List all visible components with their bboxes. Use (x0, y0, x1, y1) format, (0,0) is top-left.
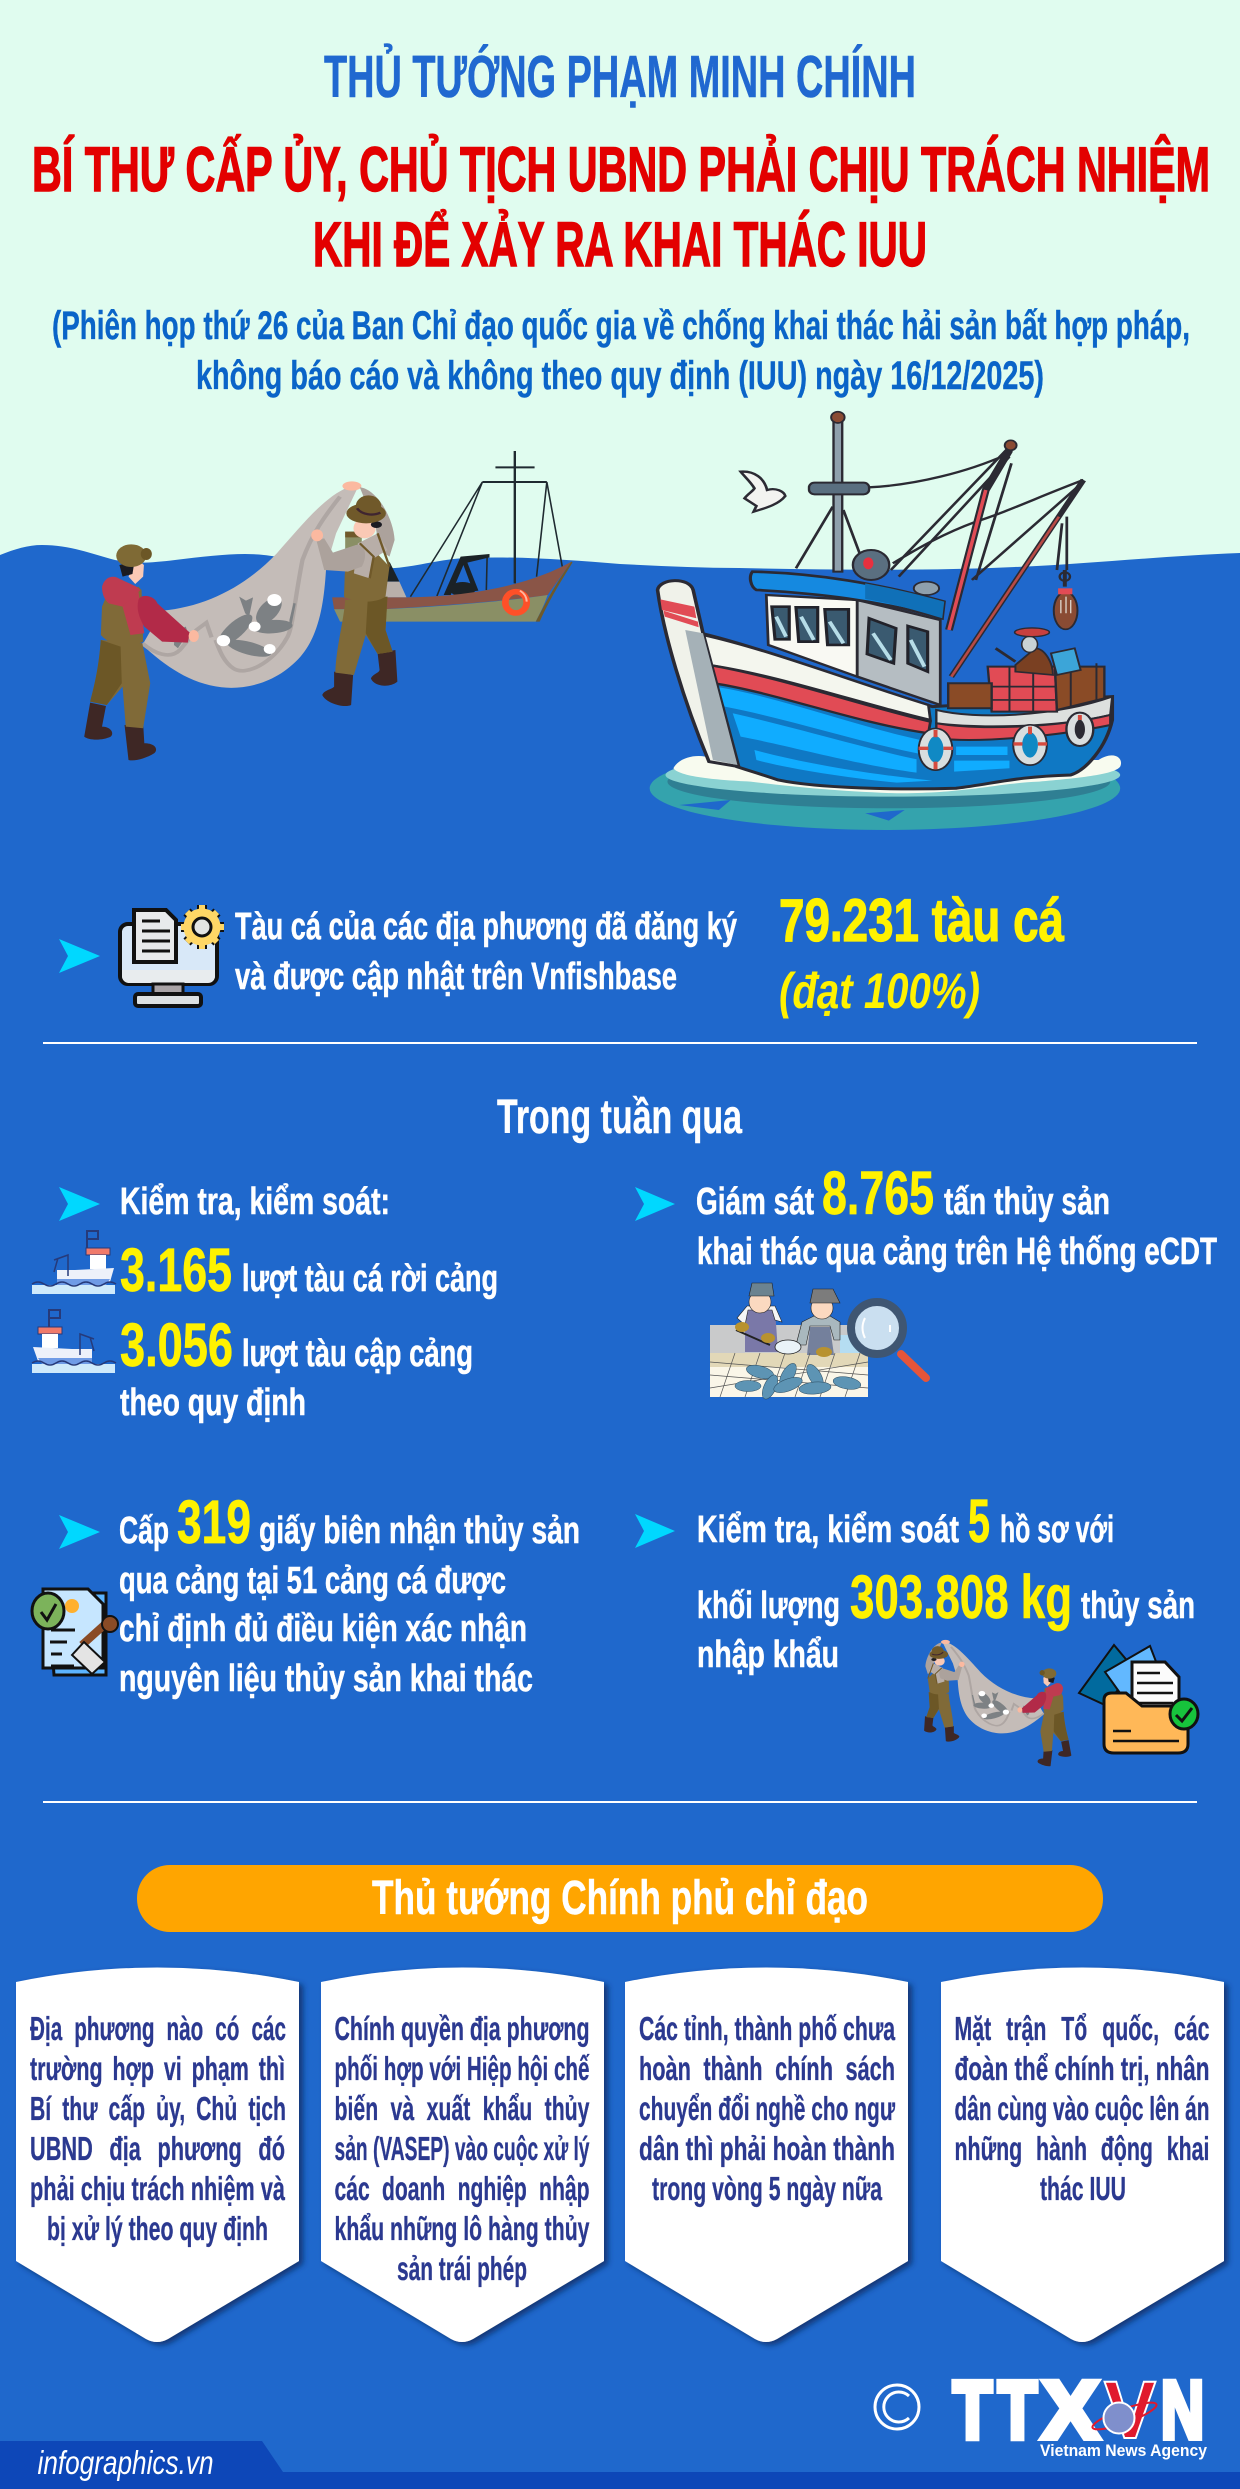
figure: 79.231 vessels: 79.231 tàu cá (779, 887, 1064, 954)
icon: folder with check mark (1079, 1645, 1198, 1753)
card 1: local accountability: Địa phương nào có các (30, 2010, 286, 2047)
arrow bullet (59, 1515, 100, 1549)
card 3: career change policy: trong vòng 5 ngày nữa (652, 2170, 882, 2207)
logo: TTXVN Vietnam News Agency: T (998, 2365, 1037, 2456)
card 2: VASEP cooperation: biến và xuất khẩu thủy (334, 2090, 590, 2127)
hull (701, 633, 1112, 789)
header titles (32, 43, 1210, 398)
heading line 2: KHI ĐỂ XẢY RA KHAI THÁC IUU (313, 209, 927, 280)
life rings (919, 715, 1089, 769)
background: blue sea with wavy top (0, 545, 1240, 2489)
arrow bullet (635, 1187, 675, 1221)
arrow bullet (635, 1514, 675, 1548)
card 2: VASEP cooperation (321, 1968, 604, 2342)
card 3: career change policy: chuyển đổi nghề cho ngư (639, 2090, 895, 2127)
banner: prime minister directs (137, 1865, 1103, 1932)
icon: stamped document (32, 1589, 118, 1675)
card 3: career change policy: dân thì phải hoàn thành (639, 2130, 895, 2167)
text: dossiers: hồ sơ với (1000, 1509, 1114, 1551)
footer: copyright symbol (875, 2385, 919, 2429)
text: vessels arriving: lượt tàu cập cảng (242, 1333, 473, 1375)
text: registered vessels: Tàu cá của các địa phương đã đăng ký (235, 906, 737, 948)
stern post (658, 581, 739, 767)
icon: magnifying glass (851, 1302, 926, 1378)
icon: ship arriving (32, 1309, 116, 1373)
card 2: VASEP cooperation: Chính quyền địa phương (334, 2010, 590, 2047)
arrow bullet (59, 939, 100, 973)
logo: TTXVN Vietnam News Agency: V (1104, 2365, 1156, 2456)
figure: 5: 5 (968, 1487, 990, 1555)
card 2: VASEP cooperation: các doanh nghiệp nhập (334, 2170, 590, 2207)
banner: prime minister directs: Thủ tướng Chính phủ chỉ đạo (372, 1872, 868, 1925)
card 4: fatherland front: thác IUU (1040, 2170, 1126, 2207)
block: inspections at port: theo quy định (120, 1382, 306, 1424)
fish catch (174, 594, 295, 660)
icon: ship leaving (32, 1230, 116, 1294)
net (142, 487, 358, 688)
cabin (750, 572, 944, 705)
illustration: small fishing boat (332, 451, 573, 622)
block: receipts issued: qua cảng tại 51 cảng cá được (119, 1560, 506, 1602)
figure: reached 100 percent: (đạt 100%) (779, 963, 980, 1019)
section: registered vessels (59, 887, 1064, 1019)
block: inspections at port (32, 1181, 498, 1424)
text: inspect: Kiểm tra, kiểm soát (697, 1509, 959, 1551)
card 3: career change policy: Các tỉnh, thành phố chưa (639, 2010, 895, 2047)
logo: TTXVN Vietnam News Agency (953, 2365, 1207, 2460)
water and foam under the boat (650, 747, 1121, 830)
block: monitoring eCDT (635, 1159, 1217, 1401)
text: vessels leaving port: lượt tàu cá rời cảng (242, 1258, 498, 1300)
illustration: large blue fishing boat with seagull (650, 412, 1121, 830)
card 3: career change policy (625, 1968, 908, 2342)
card 1: local accountability: Bí thư cấp ủy, Chủ tịch (30, 2090, 286, 2127)
block: receipts issued: nguyên liệu thủy sản khai thác (119, 1658, 533, 1700)
card 1: local accountability: trường hợp vi phạm thì (30, 2050, 285, 2087)
heading: last week: Trong tuần qua (497, 1091, 742, 1144)
footer bar (0, 2441, 1240, 2489)
block: receipts issued (32, 1488, 580, 1700)
section: registered vessels: và được cập nhật trên Vnfishbase (235, 956, 677, 998)
card 4: fatherland front (941, 1968, 1224, 2342)
figure: 3.165: 3.165 (120, 1236, 232, 1304)
card 1: local accountability: phải chịu trách nhiệm và (30, 2170, 285, 2207)
text: receipts: giấy biên nhận thủy sản (259, 1510, 580, 1552)
left fisherman in red shirt (84, 544, 199, 760)
figure: 303.808 kg: 303.808 kg (850, 1563, 1072, 1631)
text: issue: Cấp (119, 1510, 169, 1552)
illustration: workers sorting fish (710, 1283, 868, 1401)
logo: TTXVN Vietnam News Agency: X (1042, 2365, 1099, 2456)
footer: website: infographics.vn (38, 2444, 214, 2481)
text: tonnes: tấn thủy sản (944, 1181, 1110, 1223)
figure: 319: 319 (177, 1488, 251, 1556)
logo: TTXVN Vietnam News Agency: T (953, 2365, 992, 2456)
logo: TTXVN Vietnam News Agency: Vietnam News Agency (1040, 2441, 1207, 2460)
title: prime minister: THỦ TƯỚNG PHẠM MINH CHÍNH (324, 43, 916, 110)
logo: TTXVN Vietnam News Agency: N (1161, 2365, 1204, 2456)
right fisherman in hat (311, 481, 397, 706)
card 3: career change policy: hoàn thành chính sách (639, 2050, 895, 2087)
text: seafood imports: thủy sản (1081, 1585, 1195, 1627)
block: import dossiers: nhập khẩu (697, 1634, 839, 1676)
seagull (741, 472, 785, 512)
text: inspection label: Kiểm tra, kiểm soát: (120, 1181, 390, 1223)
card 1: local accountability: UBND địa phương đó (30, 2130, 285, 2167)
card 1: local accountability (16, 1968, 299, 2342)
block: import dossiers (635, 1487, 1198, 1766)
icon: computer with document and gear (120, 905, 224, 1006)
figure: 3.056: 3.056 (120, 1311, 233, 1379)
arrow bullet (59, 1187, 100, 1221)
block: import dossiers: khối lượng (697, 1585, 840, 1627)
card 2: VASEP cooperation: sản trái phép (397, 2250, 527, 2287)
fisherman and crates on the stern (948, 628, 1104, 712)
hanging weight (1054, 570, 1077, 629)
card 1: local accountability: bị xử lý theo quy định (47, 2210, 268, 2247)
text: monitoring: Giám sát (696, 1181, 814, 1223)
masts, booms and rigging (796, 412, 1083, 677)
card 2: VASEP cooperation: sản (VASEP) vào cuộc xử lý (334, 2130, 590, 2167)
card 2: VASEP cooperation: phối hợp với Hiệp hội chế (334, 2050, 590, 2087)
figure: 8.765: 8.765 (822, 1159, 934, 1227)
illustration: two fishermen hauling a net (84, 481, 397, 760)
card 2: VASEP cooperation: khẩu những lô hàng thủy (334, 2210, 590, 2247)
block: receipts issued: chỉ định đủ điều kiện xác nhận (119, 1608, 527, 1650)
illustration: small fishermen with net (924, 1640, 1071, 1766)
